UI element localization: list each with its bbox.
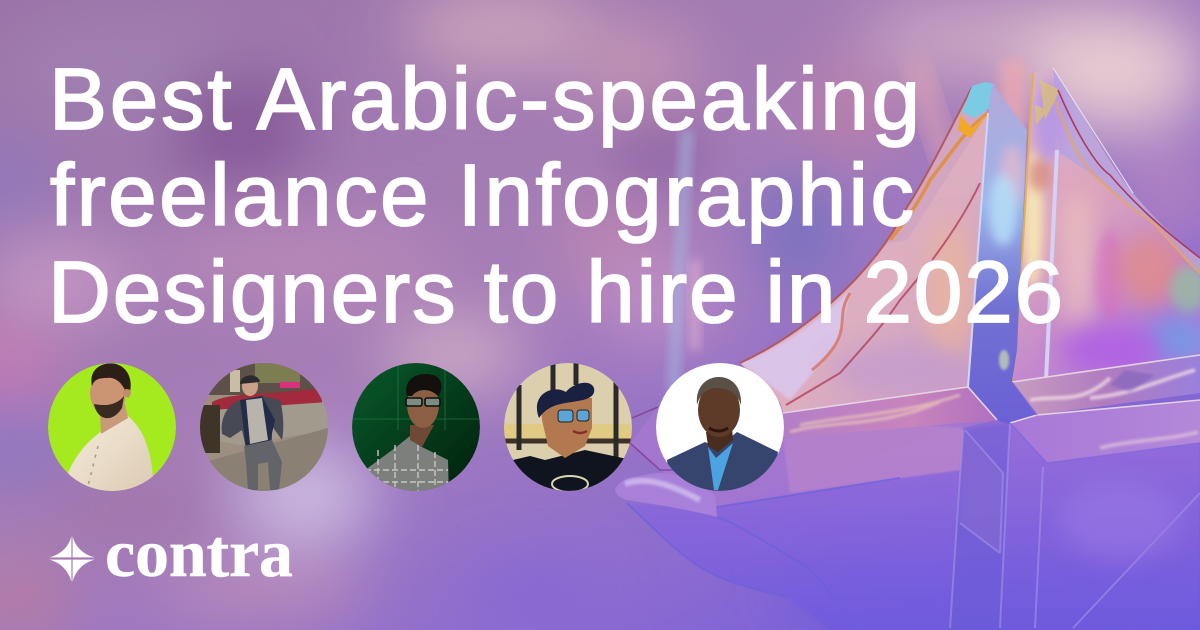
title bbox=[48, 51, 1063, 341]
wordmark: contra bbox=[105, 515, 293, 591]
avatar 5: man in navy blazer on white bbox=[656, 363, 784, 495]
title: Designers to hire in 2026 bbox=[48, 244, 1063, 341]
glass crystal sculpture bbox=[615, 68, 1200, 630]
designer avatars row bbox=[48, 363, 784, 500]
avatar 3: man with glasses on dark green bbox=[352, 363, 480, 500]
title: Best Arabic-speaking bbox=[49, 51, 920, 148]
title: freelance Infographic bbox=[50, 147, 914, 244]
avatar 1: man in cream shirt on lime bbox=[48, 363, 176, 495]
left glass sail bbox=[740, 82, 995, 413]
avatar 4: man in cap and sunglasses bbox=[504, 363, 632, 500]
glass lower panels bbox=[615, 387, 1200, 630]
center glass blade bbox=[968, 83, 1037, 424]
avatar 2: man seated in mall bbox=[200, 363, 328, 500]
right glass sail bbox=[1012, 68, 1200, 382]
contra logo bbox=[49, 515, 293, 591]
icon: four-point star bbox=[49, 536, 95, 582]
glass horizontal bands bbox=[783, 355, 1200, 463]
